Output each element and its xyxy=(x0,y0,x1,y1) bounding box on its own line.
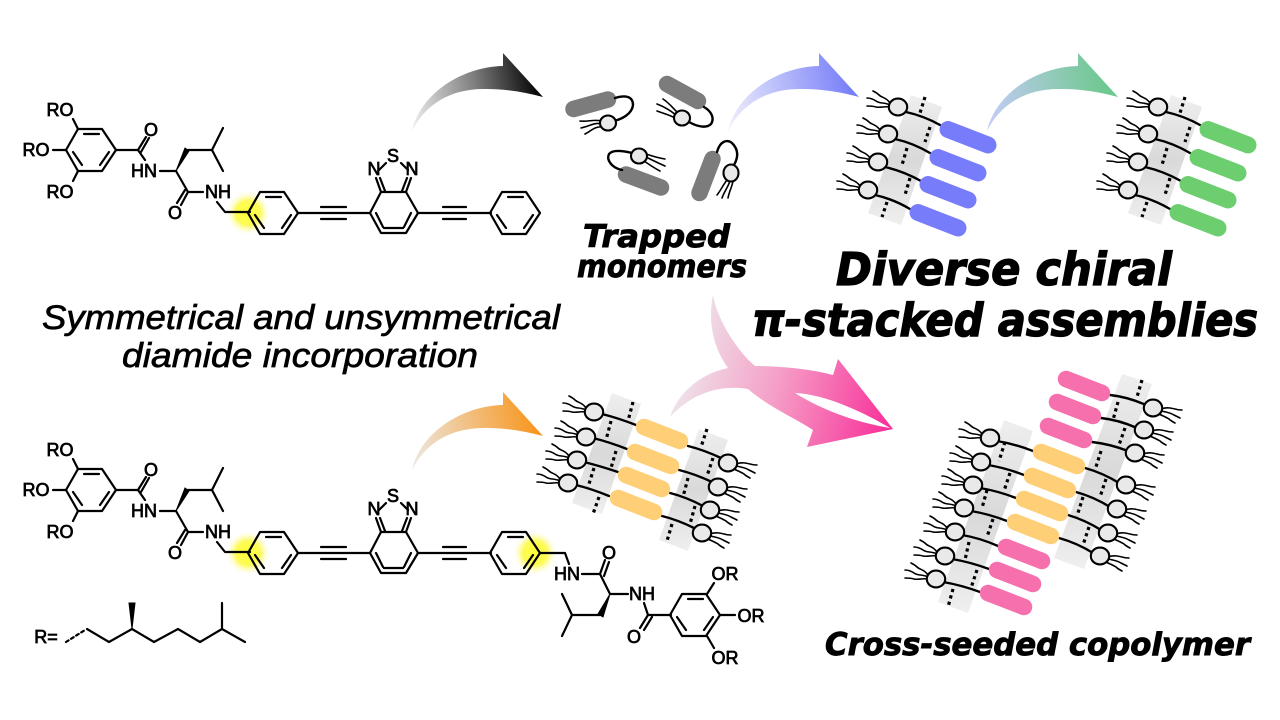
cross-seeded copolymer xyxy=(905,374,1182,613)
left amide linker: HN xyxy=(131,501,157,521)
left alkyne xyxy=(298,547,370,559)
label: cross-seeded copolymer: Cross-seeded copolymer xyxy=(825,627,1252,663)
left phenylene ring xyxy=(248,532,298,574)
arrow: blue xyxy=(728,53,859,131)
label: symmetrical and unsymmetrical diamide incorporation: Symmetrical and unsymmetrical xyxy=(42,299,561,337)
right band xyxy=(659,429,728,551)
pink blocks xyxy=(988,379,1102,607)
label: symmetrical and unsymmetrical diamide incorporation xyxy=(42,299,561,375)
highlights: yellow glows xyxy=(226,531,557,575)
orange blocks xyxy=(1015,452,1077,536)
right amide linker: HN xyxy=(554,564,580,584)
left band xyxy=(572,393,641,514)
R group definition: R= xyxy=(34,627,58,647)
heading: diverse chiral pi-stacked assemblies: Diverse chiral xyxy=(836,243,1173,296)
gallate ring with RO groups: RO xyxy=(46,100,74,120)
left gallate ring with RO groups: RO xyxy=(46,440,74,460)
molecule: symmetrical diamide xyxy=(22,440,765,668)
trapped monomers xyxy=(574,84,738,198)
amide and leucine linker: HN xyxy=(131,161,157,181)
gallate ring with RO groups: RO xyxy=(22,140,50,160)
benzothiadiazole: S xyxy=(387,146,399,166)
central benzothiadiazole: N xyxy=(368,499,380,519)
molecule: unsymmetrical diamide xyxy=(22,100,540,235)
right gallate ring with OR groups: OR xyxy=(738,606,765,626)
right alkyne xyxy=(418,547,491,559)
blue assembly xyxy=(837,91,988,228)
label: trapped monomers: monomers xyxy=(577,249,747,285)
benzothiadiazole: N xyxy=(406,159,418,179)
right amide linker: NH xyxy=(629,584,655,604)
right phenylene ring xyxy=(490,532,540,574)
heading: diverse chiral pi-stacked assemblies xyxy=(752,243,1258,347)
orange assembly xyxy=(537,393,757,551)
right amide linker: O xyxy=(627,627,641,647)
central benzothiadiazole xyxy=(368,486,418,573)
R group definition xyxy=(34,603,245,647)
monomer 1 xyxy=(574,96,633,134)
amide and leucine linker xyxy=(116,120,250,223)
left amide linker xyxy=(116,460,250,563)
arrow: orange xyxy=(412,392,543,470)
gallate ring with RO groups xyxy=(22,100,116,202)
benzothiadiazole: N xyxy=(368,159,380,179)
arrow: blue to green xyxy=(987,53,1118,131)
right band xyxy=(1054,374,1152,569)
amide and leucine linker: O xyxy=(144,120,158,140)
arrow: pink xyxy=(670,295,893,447)
arrow: black xyxy=(412,53,543,131)
left amide linker: O xyxy=(144,460,158,480)
right gallate ring with OR groups xyxy=(670,564,765,668)
phenylene ring xyxy=(248,192,298,234)
label: trapped monomers: Trapped xyxy=(583,219,731,255)
left amide linker: NH xyxy=(205,522,231,542)
right amide linker: O xyxy=(602,543,616,563)
right gallate ring with OR groups: OR xyxy=(712,648,739,668)
central benzothiadiazole: S xyxy=(387,486,399,506)
amide and leucine linker: NH xyxy=(205,182,231,202)
alkyne 1 xyxy=(298,207,370,219)
right amide linker xyxy=(540,543,671,647)
label: trapped monomers xyxy=(577,219,747,285)
left band xyxy=(938,420,1033,613)
alkyne 2 xyxy=(418,207,491,219)
monomer 4 xyxy=(700,141,738,198)
monomer 2 xyxy=(657,84,713,127)
left gallate ring with RO groups xyxy=(22,440,116,542)
green assembly xyxy=(1097,91,1248,228)
terminal phenyl ring xyxy=(490,192,540,234)
monomer 3 xyxy=(608,148,665,188)
left gallate ring with RO groups: RO xyxy=(46,522,74,542)
left gallate ring with RO groups: RO xyxy=(22,480,50,500)
highlight: yellow glow xyxy=(226,191,270,235)
right gallate ring with OR groups: OR xyxy=(712,564,739,584)
left amide linker: O xyxy=(168,543,182,563)
gallate ring with RO groups: RO xyxy=(46,182,74,202)
benzothiadiazole xyxy=(368,146,418,233)
central benzothiadiazole: N xyxy=(406,499,418,519)
label: symmetrical and unsymmetrical diamide incorporation: diamide incorporation xyxy=(122,337,478,375)
amide and leucine linker: O xyxy=(168,203,182,223)
